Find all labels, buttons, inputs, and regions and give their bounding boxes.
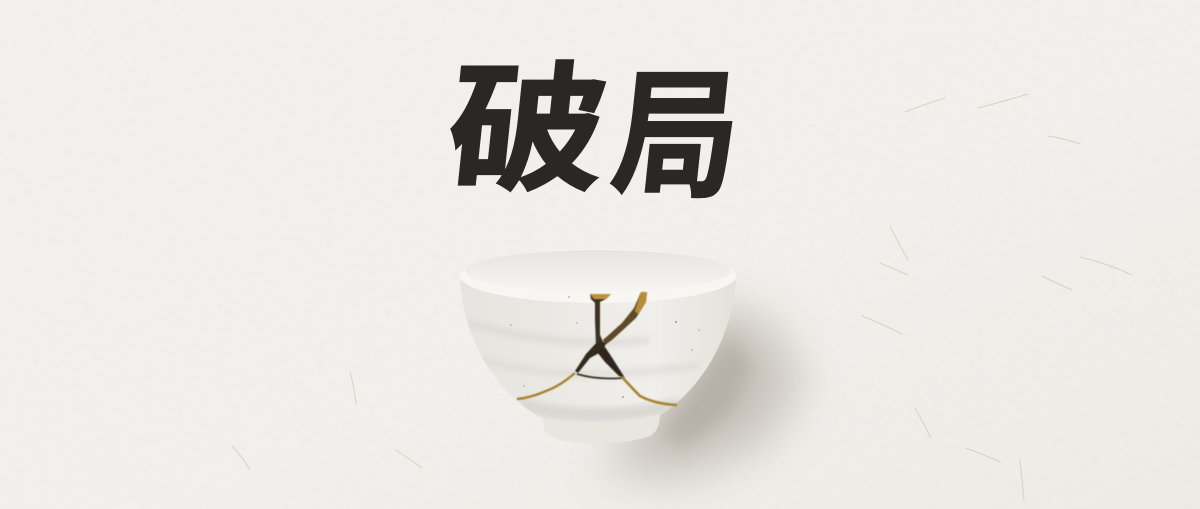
glaze speckles <box>510 296 700 398</box>
bowl body <box>460 280 736 424</box>
title: 破局: 破 <box>440 52 616 209</box>
title: 破局 <box>440 52 747 215</box>
bowl interior <box>465 250 731 292</box>
bowl foot <box>541 412 660 443</box>
wheel-thrown glaze bands <box>465 322 700 415</box>
kintsugi bowl <box>460 249 736 443</box>
title: 破局: 局 <box>605 59 747 215</box>
bowl shadow on wall <box>600 300 805 480</box>
bowl rim <box>460 249 736 303</box>
gold repair: cracks <box>517 292 677 405</box>
